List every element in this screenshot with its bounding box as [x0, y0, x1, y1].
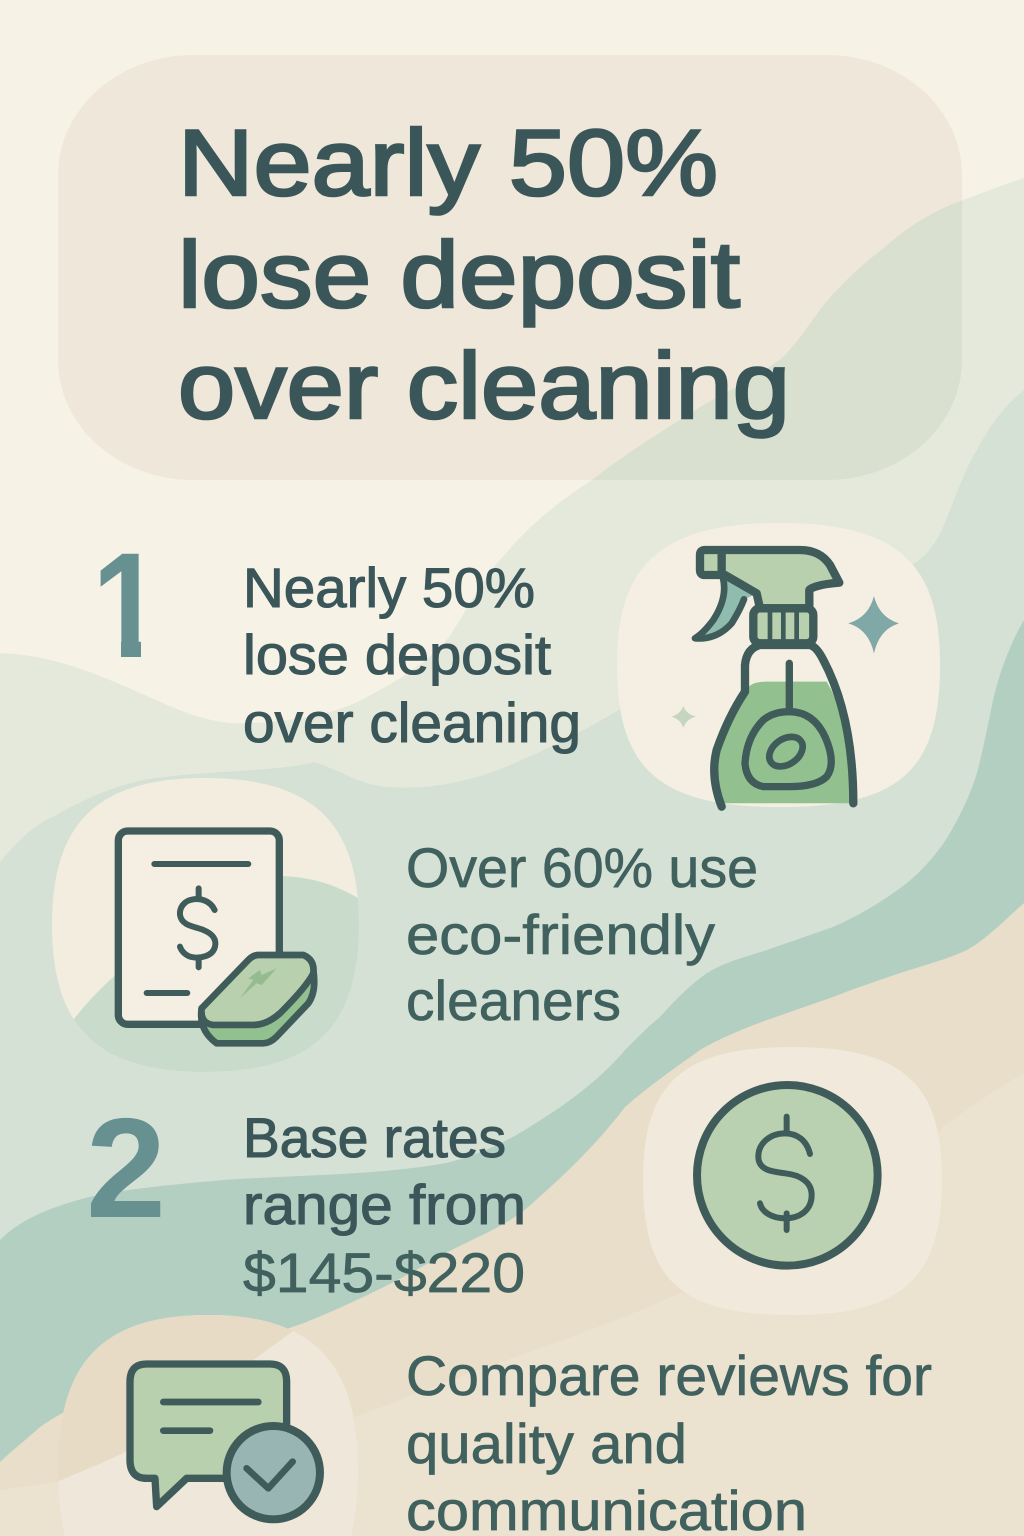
- text block: item 3: Base rates: [243, 1106, 506, 1169]
- text block: item 2: eco-friendly: [406, 903, 715, 966]
- text block: item 1: [243, 556, 581, 754]
- text block: item 2: [406, 836, 758, 1032]
- text block: item 1: over cleaning: [243, 691, 581, 754]
- text block: item 1: Nearly 50%: [243, 556, 535, 619]
- text block: item 2: Over 60% use: [406, 836, 758, 899]
- heading: title: over cleaning: [178, 333, 790, 438]
- heading: title: Nearly 50%: [178, 110, 718, 215]
- text block: item 1: lose deposit: [243, 623, 551, 686]
- number 1: 1: [92, 521, 162, 689]
- text block: item 3: range from: [243, 1173, 526, 1236]
- panel: invoice and sponge: [50, 778, 360, 1090]
- text block: item 4: quality and: [406, 1412, 687, 1475]
- text block: item 4: Compare reviews for: [406, 1344, 932, 1407]
- heading: title: [178, 110, 790, 438]
- text block: item 4: [406, 1344, 932, 1536]
- icon: sponge: [201, 955, 314, 1043]
- icon: dollar coin: [697, 1085, 878, 1266]
- text block: item 3: [243, 1106, 526, 1304]
- text block: item 2: cleaners: [406, 969, 621, 1032]
- icon: spray bottle: [671, 550, 899, 807]
- icon: large sparkle: [848, 596, 899, 653]
- heading: title: lose deposit: [178, 222, 740, 327]
- icon: invoice with dollar sign: [118, 831, 314, 1043]
- panel: spray bottle: [617, 523, 940, 807]
- panel: title card: [58, 55, 962, 480]
- icon: small sparkle: [671, 706, 696, 728]
- icon: check badge: [227, 1426, 320, 1519]
- panel: dollar coin: [643, 1047, 942, 1315]
- panel: review chat: [58, 1315, 358, 1536]
- icon: chat bubble with check: [130, 1364, 320, 1519]
- text block: item 3: $145-$220: [243, 1241, 525, 1304]
- number 2: 2: [86, 1089, 166, 1248]
